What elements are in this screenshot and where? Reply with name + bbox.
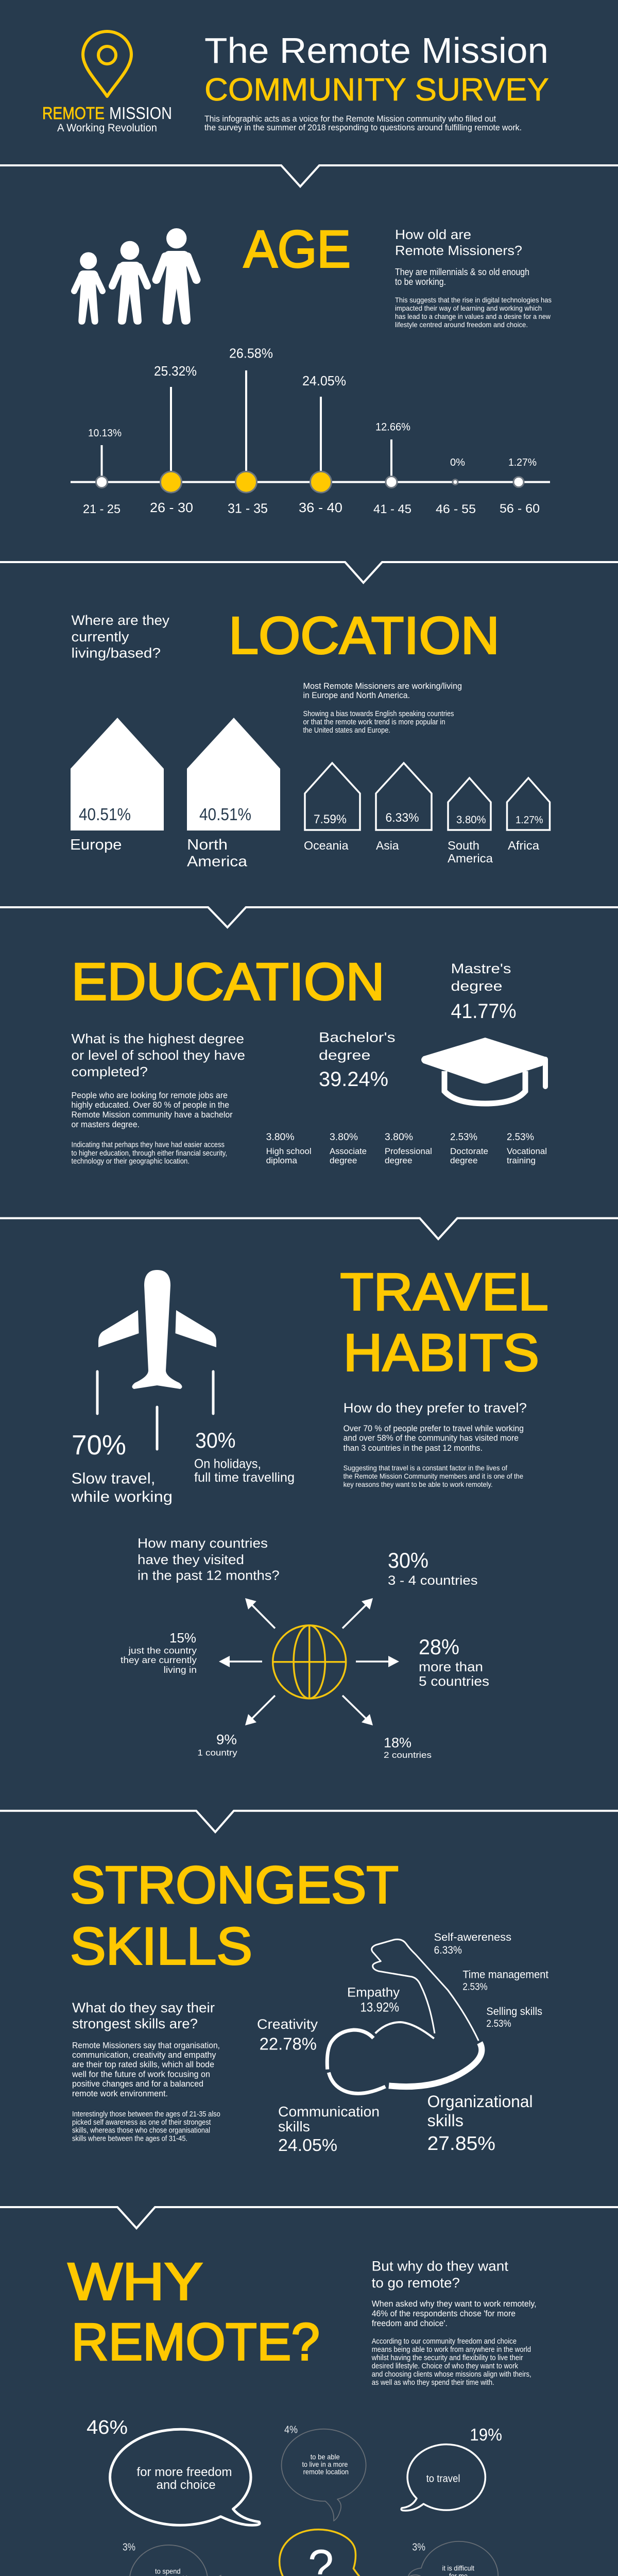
heading: strongest skills: STRONGEST xyxy=(70,1856,399,1914)
stat: self-awareness xyxy=(434,1931,511,1956)
stat: slow travel xyxy=(71,1430,173,1505)
chart: age lollipop timeline: 24.05% xyxy=(302,373,346,388)
intro text: the survey in the summer of 2018 responding to questions around fulfilling remote work. xyxy=(204,123,522,132)
house chart: north america: America xyxy=(187,854,248,870)
question: how many countries: in the past 12 months? xyxy=(138,1567,280,1583)
text: top rated skills: Remote Missioners say that organisation, xyxy=(72,2040,220,2050)
stat: high school diploma: diploma xyxy=(266,1156,298,1165)
speech bubble: remote location 4 percent: 4% xyxy=(284,2424,298,2435)
stat: high school diploma xyxy=(266,1132,312,1165)
speech bubble: family 3 percent xyxy=(123,2542,221,2576)
logo wordmark: MISSION xyxy=(109,104,172,123)
stat: just the country: just the country xyxy=(128,1646,197,1656)
stat: professional degree xyxy=(385,1132,432,1165)
house chart: asia: Asia xyxy=(376,839,399,852)
heading: strongest skills: SKILLS xyxy=(70,1917,252,1975)
chart: age lollipop timeline: 26.58% xyxy=(229,345,273,361)
heading: why remote: WHY xyxy=(68,2252,203,2311)
stat: doctorate degree xyxy=(450,1132,488,1165)
stat: organizational xyxy=(427,2092,533,2155)
panel: age xyxy=(71,219,552,516)
question: highest degree: or level of school they have xyxy=(71,1047,245,1063)
text: top rated skills: positive changes and for a balanced xyxy=(72,2079,203,2089)
question: how travel: How do they prefer to travel? xyxy=(344,1400,527,1416)
text: 46 percent xyxy=(372,2299,537,2328)
heading: travel habits: HABITS xyxy=(344,1323,539,1382)
speech bubble: commute 3 percent xyxy=(408,2541,498,2576)
text: 46 percent: freedom and choice'. xyxy=(372,2318,448,2328)
text: freedom and choice meaning: whilst having the security and flexibility to live their xyxy=(371,2353,523,2362)
text: top rated skills: communication, creativity and empathy xyxy=(72,2050,216,2060)
speech bubble: remote location 4 percent: to live in a more xyxy=(302,2460,348,2468)
stat: selling skills: 2.53% xyxy=(486,2019,511,2029)
text: millennials: They are millennials & so old enough xyxy=(395,267,529,277)
speech bubble: remote location 4 percent: to be able xyxy=(311,2453,340,2461)
speech bubble: travel 19 percent: to travel xyxy=(426,2473,460,2485)
house chart: europe: 40.51% xyxy=(79,805,131,824)
arrows: six directions xyxy=(219,1598,399,1725)
question: how old xyxy=(395,227,522,258)
text: millennials xyxy=(395,267,529,287)
stat: slow travel: Slow travel, xyxy=(71,1470,156,1487)
stat: doctorate degree: degree xyxy=(450,1156,478,1165)
heading: strongest skills xyxy=(70,1856,399,1975)
chart: age lollipop timeline xyxy=(71,345,550,516)
chart: age lollipop timeline: 10.13% xyxy=(88,428,122,439)
text: easier access: technology or their geographic location. xyxy=(71,1157,190,1165)
stat: bachelors degree: degree xyxy=(319,1047,370,1063)
text: top rated skills xyxy=(72,2040,220,2098)
stat: time management: Time management xyxy=(462,1969,548,1981)
stat: communication xyxy=(278,2104,380,2155)
question: how many countries xyxy=(138,1535,280,1583)
text: digital technologies: lifestyle centred around freedom and choice. xyxy=(395,320,528,329)
text: freedom and choice meaning: as well as who they spend their time with. xyxy=(372,2378,494,2387)
house chart: asia: 6.33% xyxy=(385,811,419,825)
stat: full time travelling xyxy=(194,1428,295,1485)
text: digital technologies: impacted their way of learning and working which xyxy=(395,304,542,312)
title xyxy=(204,30,549,108)
stat: creativity: 22.78% xyxy=(260,2034,317,2054)
stat: time management: 2.53% xyxy=(462,1982,488,1993)
text: freedom and choice meaning xyxy=(371,2337,531,2387)
question: highest degree xyxy=(71,1031,245,1079)
stat: masters degree xyxy=(451,961,516,1023)
icon: flexed arm xyxy=(327,1939,482,2093)
stat: full time travelling: On holidays, xyxy=(194,1457,261,1471)
title: The Remote Mission xyxy=(204,30,548,71)
speech bubble: freedom and choice 46 percent xyxy=(87,2417,260,2525)
text: highly educated: or masters degree. xyxy=(71,1120,140,1129)
stat: empathy: Empathy xyxy=(347,1985,400,1999)
text: highly educated: highly educated. Over 80 % of people in the xyxy=(71,1100,229,1110)
stat: bachelors degree: 39.24% xyxy=(319,1068,388,1091)
text: 46 percent: 46% of the respondents chose 'for more xyxy=(372,2309,516,2318)
text: freedom and choice meaning: desired lifestyle. Choice of who they want to work xyxy=(372,2362,518,2370)
stat: 2 countries: 2 countries xyxy=(384,1750,432,1760)
panel: why remote xyxy=(68,2252,537,2576)
speech bubble: travel 19 percent xyxy=(401,2425,502,2511)
stat: 3-4 countries: 3 - 4 countries xyxy=(388,1573,478,1588)
speech bubble: family 3 percent: 3% xyxy=(123,2542,135,2553)
stat: masters degree: Mastre's xyxy=(451,961,511,976)
panel: education xyxy=(71,952,547,1165)
house chart: africa xyxy=(507,778,550,852)
stat: just the country xyxy=(121,1630,197,1675)
stat: vocational training: Vocational xyxy=(507,1146,547,1156)
stat: more than 5 countries: more than xyxy=(419,1659,483,1674)
stat: organizational: Organizational xyxy=(427,2092,533,2111)
icon: globe xyxy=(273,1625,346,1699)
speech bubble: remote location 4 percent: remote location xyxy=(303,2467,349,2476)
house chart: south america: 3.80% xyxy=(456,814,486,826)
stat: professional degree: Professional xyxy=(385,1146,432,1156)
heading: education: EDUCATION xyxy=(71,952,385,1011)
logo wordmark xyxy=(42,104,172,134)
stat: more than 5 countries: 5 countries xyxy=(419,1673,489,1689)
house chart: south america: America xyxy=(448,852,493,865)
stat: doctorate degree: 2.53% xyxy=(450,1132,477,1143)
text: constant factor: Suggesting that travel is a constant factor in the lives of xyxy=(344,1464,507,1472)
text: over 70 percent: than 3 countries in the past 12 months. xyxy=(344,1443,483,1453)
chart: age lollipop timeline: 26 - 30 xyxy=(150,500,193,515)
text: constant factor xyxy=(344,1464,523,1488)
house chart: south america: South xyxy=(448,839,479,852)
stat: 1 country: 1 country xyxy=(197,1748,237,1758)
text: europe and north america: Most Remote Missioners are working/living xyxy=(303,681,462,691)
chart: age lollipop timeline: 31 - 35 xyxy=(228,501,268,516)
stat: creativity xyxy=(257,2016,318,2054)
text: easier access xyxy=(71,1141,227,1165)
house chart: africa: 1.27% xyxy=(516,815,543,826)
stat: vocational training: 2.53% xyxy=(507,1132,534,1143)
question: strongest skills xyxy=(72,2000,215,2031)
text: europe and north america xyxy=(303,681,462,700)
logo wordmark: A Working Revolution xyxy=(57,122,157,134)
chart: age lollipop timeline: 25.32% xyxy=(154,363,197,379)
stat: associate degree: 3.80% xyxy=(330,1132,358,1143)
text: over 70 percent xyxy=(344,1423,524,1453)
heading: location: LOCATION xyxy=(229,606,500,665)
question: strongest skills: strongest skills are? xyxy=(72,2016,198,2031)
stat: doctorate degree: Doctorate xyxy=(450,1146,488,1156)
question: strongest skills: What do they say their xyxy=(72,2000,215,2015)
speech bubble: freedom and choice 46 percent: and choice xyxy=(157,2478,216,2492)
text: 46 percent: When asked why they want to work remotely, xyxy=(372,2299,537,2309)
text: freedom and choice meaning: and choosing clients whose missions align with theirs, xyxy=(372,2370,531,2379)
speech bubble: travel 19 percent: 19% xyxy=(470,2425,502,2444)
house chart: south america xyxy=(448,778,493,865)
text: easier access: to higher education, through either financial security, xyxy=(71,1149,227,1158)
stat: slow travel: 70% xyxy=(72,1430,126,1461)
stat: more than 5 countries xyxy=(419,1635,489,1689)
text: top rated skills: well for the future of work focusing on xyxy=(72,2069,210,2079)
house chart: asia xyxy=(376,763,432,852)
icon: graduation cap xyxy=(422,1039,546,1104)
stat: just the country: 15% xyxy=(169,1630,196,1646)
text: digital technologies: has lead to a change in values and a desire for a new xyxy=(395,312,551,320)
text: age interest: Interestingly those between the ages of 21-35 also xyxy=(72,2110,220,2119)
question: how old: How old are xyxy=(395,227,471,242)
stat: time management xyxy=(462,1969,548,1993)
text: highly educated: Remote Mission community have a bachelor xyxy=(71,1110,233,1120)
stat: communication: Communication xyxy=(278,2104,380,2120)
stat: more than 5 countries: 28% xyxy=(419,1635,459,1659)
stat: associate degree xyxy=(330,1132,367,1165)
house chart: north america: North xyxy=(187,837,228,853)
house chart: oceania: 7.59% xyxy=(314,812,347,826)
text: over 70 percent: and over 58% of the community has visited more xyxy=(344,1433,519,1443)
stat: just the country: living in xyxy=(164,1665,197,1675)
house chart: oceania: Oceania xyxy=(304,839,349,852)
stat: high school diploma: High school xyxy=(266,1146,312,1156)
text: age interest xyxy=(72,2110,220,2143)
question: why go remote: to go remote? xyxy=(372,2275,460,2291)
stat: empathy: 13.92% xyxy=(360,2000,399,2014)
intro text: This infographic acts as a voice for the Remote Mission community who filled out xyxy=(204,114,496,124)
text: top rated skills: are their top rated skills, which all bode xyxy=(72,2060,214,2070)
stat: communication: 24.05% xyxy=(278,2136,337,2155)
stat: professional degree: 3.80% xyxy=(385,1132,413,1143)
chart: age lollipop timeline: 0% xyxy=(450,457,465,468)
speech bubble: freedom and choice 46 percent: 46% xyxy=(87,2417,128,2438)
stat: 1 country xyxy=(197,1732,237,1758)
icon: location pin logo xyxy=(83,31,131,96)
heading: age: AGE xyxy=(244,219,351,278)
panel: travel habits xyxy=(71,1262,548,1760)
question: highest degree: completed? xyxy=(71,1064,148,1079)
heading: travel habits xyxy=(340,1262,548,1382)
speech bubble: family 3 percent: to spend xyxy=(155,2567,181,2575)
house chart: africa: Africa xyxy=(508,839,539,852)
stat: 3-4 countries: 30% xyxy=(388,1548,428,1572)
question: where based: Where are they xyxy=(71,613,170,628)
stat: high school diploma: 3.80% xyxy=(266,1132,295,1143)
stat: 1 country: 9% xyxy=(216,1732,237,1748)
stat: selling skills xyxy=(486,2006,542,2029)
icon: three people xyxy=(74,228,197,325)
house chart: europe: Europe xyxy=(70,837,122,853)
icon: head with question mark xyxy=(280,2530,363,2576)
chart: age lollipop timeline: 46 - 55 xyxy=(436,502,476,516)
heading: why remote: REMOTE? xyxy=(71,2312,320,2371)
stat: organizational: skills xyxy=(427,2111,464,2130)
stat: empathy xyxy=(347,1985,400,2014)
stat: creativity: Creativity xyxy=(257,2016,318,2032)
stat: professional degree: degree xyxy=(385,1156,412,1165)
chart: age lollipop timeline: 41 - 45 xyxy=(373,502,411,516)
question: how old: Remote Missioners? xyxy=(395,243,522,258)
stat: slow travel: while working xyxy=(71,1488,173,1505)
text: top rated skills: remote work environment. xyxy=(72,2089,168,2098)
text: english bias: Showing a bias towards English speaking countries xyxy=(303,710,454,718)
text: highly educated: People who are looking for remote jobs are xyxy=(71,1090,228,1100)
chart: age lollipop timeline: 56 - 60 xyxy=(500,502,540,516)
text: digital technologies: This suggests that the rise in digital technologies has xyxy=(395,296,552,304)
text: digital technologies xyxy=(395,296,552,329)
stat: masters degree: degree xyxy=(451,978,503,994)
house chart: europe xyxy=(70,718,164,853)
question: how many countries: How many countries xyxy=(138,1535,268,1551)
stat: vocational training: training xyxy=(507,1156,536,1165)
question: where based: currently xyxy=(71,629,129,645)
question: highest degree: What is the highest degree xyxy=(71,1031,244,1046)
chart: age lollipop timeline: 36 - 40 xyxy=(299,500,342,515)
stat: selling skills: Selling skills xyxy=(486,2006,542,2018)
chart: age lollipop timeline: 21 - 25 xyxy=(83,502,121,516)
speech bubble: remote location 4 percent xyxy=(282,2424,366,2521)
house chart: oceania xyxy=(304,763,360,852)
text: age interest: skills, whereas those who chose organisational xyxy=(72,2127,210,2135)
stat: masters degree: 41.77% xyxy=(451,1000,516,1023)
stat: self-awareness: Self-awereness xyxy=(434,1931,511,1943)
stat: 3-4 countries xyxy=(388,1548,478,1588)
text: constant factor: the Remote Mission Community members and it is one of the xyxy=(344,1472,523,1480)
text: constant factor: key reasons they want to be able to work remotely. xyxy=(344,1480,493,1488)
header panel xyxy=(42,30,549,134)
text: over 70 percent: Over 70 % of people prefer to travel while working xyxy=(344,1423,524,1433)
question: where based xyxy=(71,613,170,660)
text: millennials: to be working. xyxy=(395,277,446,287)
question: why go remote: But why do they want xyxy=(372,2259,509,2274)
stat: 2 countries xyxy=(384,1735,432,1760)
stat: self-awareness: 6.33% xyxy=(434,1944,462,1956)
intro text xyxy=(204,114,522,132)
speech bubble: commute 3 percent: 3% xyxy=(412,2542,425,2553)
text: europe and north america: in Europe and North America. xyxy=(303,690,410,700)
text: highly educated xyxy=(71,1090,233,1129)
speech bubble: commute 3 percent: it is difficult xyxy=(442,2564,474,2572)
text: age interest: skills where between the ages of 31-45. xyxy=(72,2135,187,2143)
house chart: north america: 40.51% xyxy=(199,805,251,824)
chart: age lollipop timeline: 12.66% xyxy=(375,421,410,433)
house chart: north america xyxy=(187,718,280,870)
speech bubble: freedom and choice 46 percent: for more freedom xyxy=(136,2465,232,2479)
stat: communication: skills xyxy=(278,2119,310,2134)
question: why go remote xyxy=(372,2259,509,2291)
stat: full time travelling: 30% xyxy=(195,1428,236,1452)
stat: associate degree: Associate xyxy=(330,1146,367,1156)
title: COMMUNITY SURVEY xyxy=(204,72,549,108)
text: age interest: picked self awareness as one of their strongest xyxy=(72,2119,211,2127)
text: easier access: Indicating that perhaps they have had easier access xyxy=(71,1141,225,1149)
panel: strongest skills xyxy=(70,1856,548,2155)
stat: associate degree: degree xyxy=(330,1156,357,1165)
stat: bachelors degree: Bachelor's xyxy=(319,1030,396,1045)
text: english bias: the United states and Europe. xyxy=(303,726,390,735)
heading: why remote xyxy=(68,2252,320,2371)
stat: bachelors degree xyxy=(319,1030,396,1091)
stat: 2 countries: 18% xyxy=(384,1735,411,1751)
question: where based: living/based? xyxy=(71,645,161,660)
stat: just the country: they are currently xyxy=(121,1655,197,1665)
text: freedom and choice meaning: According to our community freedom and choice xyxy=(372,2337,517,2346)
text: english bias: or that the remote work trend is more popular in xyxy=(303,718,445,726)
chart: age lollipop timeline: 1.27% xyxy=(508,457,537,468)
icon: airplane xyxy=(97,1270,216,1449)
stat: organizational: 27.85% xyxy=(427,2133,495,2155)
panel: location xyxy=(70,606,550,870)
text: freedom and choice meaning: means being able to work from anywhere in the world xyxy=(372,2345,531,2354)
question: how many countries: have they visited xyxy=(138,1552,244,1567)
stat: vocational training xyxy=(507,1132,547,1165)
stat: full time travelling: full time travelling xyxy=(194,1470,295,1485)
logo wordmark: REMOTE xyxy=(42,104,105,123)
heading: travel habits: TRAVEL xyxy=(340,1262,548,1321)
text: english bias xyxy=(303,710,454,735)
